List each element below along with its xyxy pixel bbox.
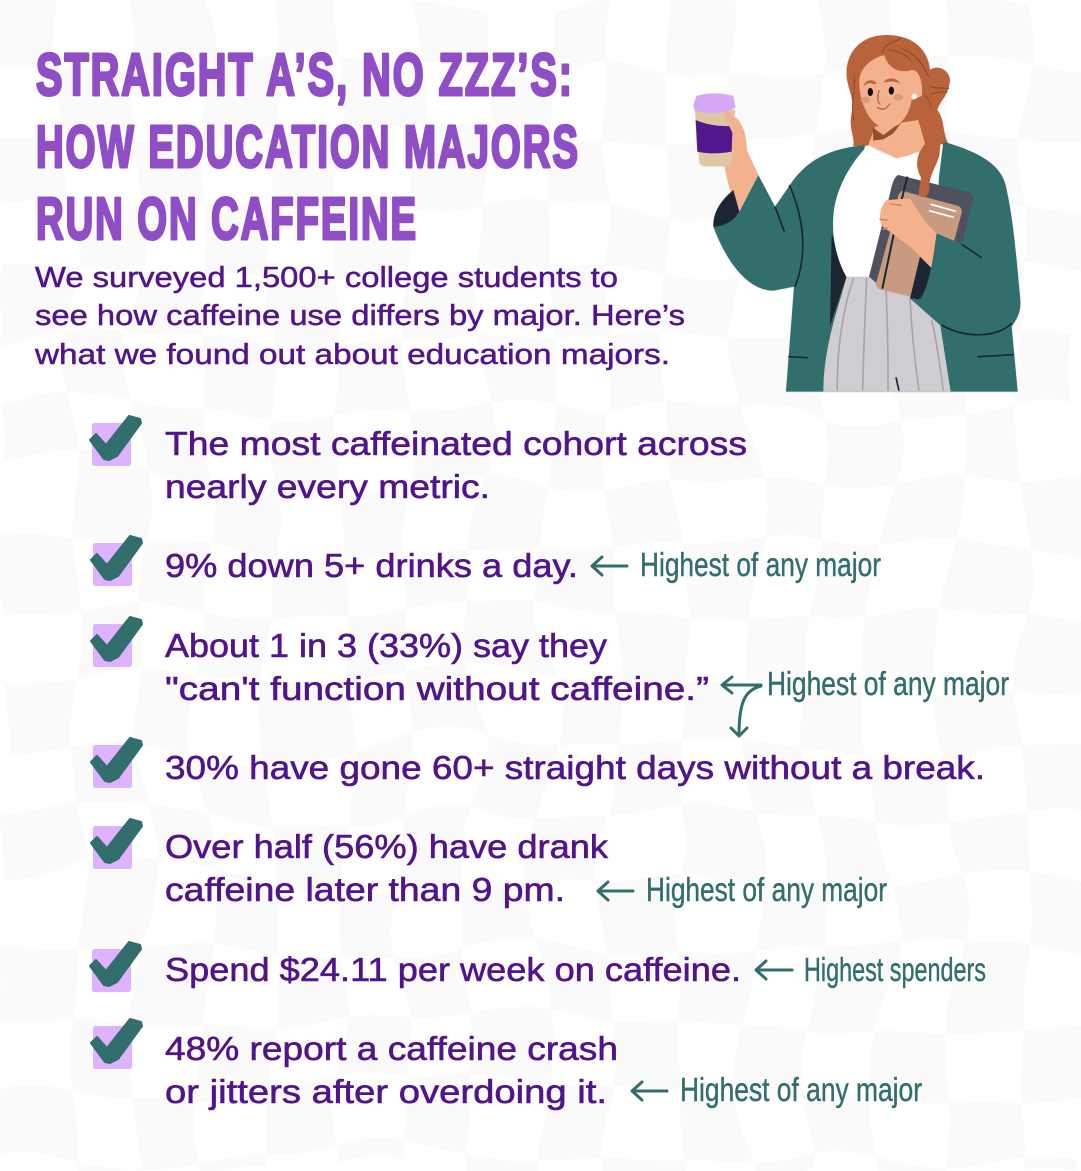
checklist item 3: About 1 in 3 (33%) say they: [165, 627, 608, 664]
illustration: student with coffee cup and notebooks: [693, 35, 1020, 392]
checklist item 1: The most caffeinated cohort across: [165, 425, 747, 462]
checklist item 4: 30% have gone 60+ straight days without a break.: [165, 749, 985, 786]
checklist item 2: 9% down 5+ drinks a day.: [165, 547, 578, 584]
annotation: branching arrow, items 3 and 4: [722, 665, 1009, 736]
intro text block: what we found out about education majors.: [34, 339, 670, 371]
annotation: highest of any major, item 7: [632, 1071, 922, 1108]
checklist item 2: [91, 536, 578, 586]
title: RUN ON CAFFEINE: [36, 186, 418, 252]
intro text block: We surveyed 1,500+ college students to: [35, 262, 618, 294]
annotation: highest of any major, item 2: [592, 546, 881, 583]
title: STRAIGHT A’S, NO ZZZ’S:: [36, 42, 574, 108]
checklist item 5: Over half (56%) have drank: [165, 828, 609, 865]
checklist item 4: [91, 738, 985, 788]
annotation: highest of any major, item 5: [598, 871, 887, 908]
checklist item 3: [91, 617, 709, 707]
checklist item 5: [91, 819, 609, 908]
annotation: highest spenders: Highest spenders: [804, 951, 986, 988]
annotation: highest of any major, item 7: Highest of any major: [680, 1071, 922, 1108]
title: HOW EDUCATION MAJORS: [36, 114, 580, 180]
checklist item 7: [91, 1019, 618, 1110]
annotation: highest of any major, item 5: Highest of any major: [646, 871, 887, 908]
intro text block: [34, 262, 685, 371]
checklist item 1: [90, 416, 747, 505]
intro text block: see how caffeine use differs by major. Here’s: [35, 300, 685, 332]
annotation: highest of any major, item 2: Highest of any major: [640, 546, 881, 583]
annotation: highest spenders: [756, 951, 986, 988]
checklist item 3: "can't function without caffeine.”: [165, 670, 709, 707]
checklist item 1: nearly every metric.: [165, 468, 490, 505]
checklist item 5: caffeine later than 9 pm.: [165, 871, 565, 908]
checklist item 6: Spend $24.11 per week on caffeine.: [165, 951, 741, 988]
checklist item 7: 48% report a caffeine crash: [165, 1030, 618, 1067]
checklist item 7: or jitters after overdoing it.: [165, 1073, 607, 1110]
checklist item 6: [90, 942, 741, 992]
annotation: branching arrow, items 3 and 4: Highest of any major: [767, 665, 1009, 702]
title: [36, 42, 580, 252]
